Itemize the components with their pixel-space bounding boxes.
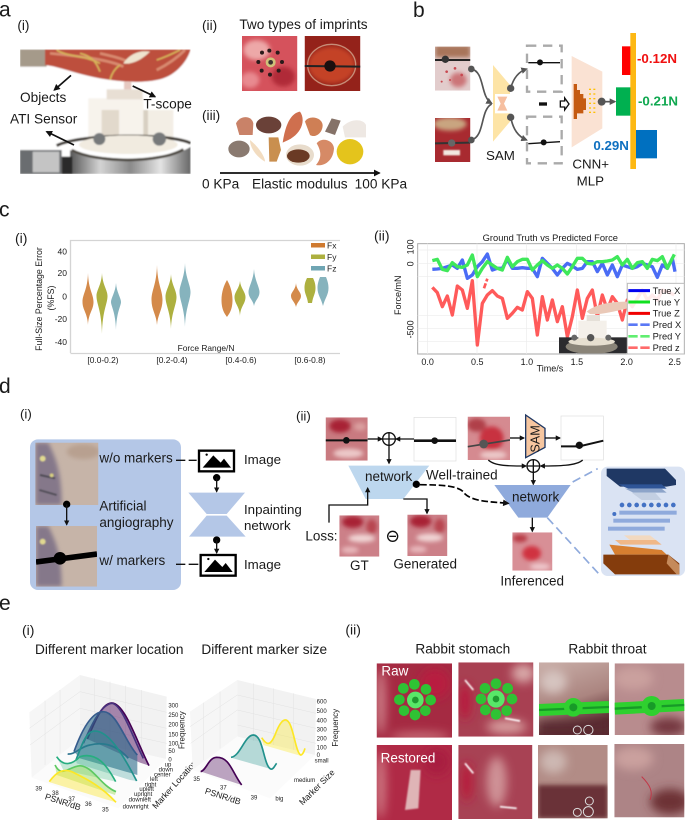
3D ridge chart: marker location: downright (123, 804, 149, 810)
chart title: Ground Truth vs Predicted Force (483, 233, 618, 243)
3D ridge chart: marker size: 600 (317, 700, 327, 706)
y axis title (34, 247, 56, 351)
3D ridge chart: marker size: big (275, 797, 283, 803)
dashed zoom lines (547, 469, 598, 573)
panel c(i): violin plot (15, 230, 340, 365)
legend: True X (653, 286, 681, 296)
violins Fy (96, 273, 316, 334)
image: restored stomach 2 (458, 745, 532, 819)
photo: force sensor and T-scope rig (20, 49, 191, 174)
3D ridge chart: marker location: Marker Location (150, 758, 199, 811)
axis label: 0 KPa to 100 KPa: 100 KPa (355, 177, 407, 192)
panel text: Artificial (99, 498, 147, 513)
inference network: network (512, 489, 559, 504)
input image 2 (435, 118, 470, 162)
label: Inferenced: Inferenced (500, 573, 564, 588)
series: red prediction peak (484, 279, 487, 288)
3D ridge chart: marker size: 200 (317, 737, 327, 743)
label: CNN+ MLP: CNN+ (572, 157, 609, 172)
axis label: 0 KPa to 100 KPa: 0 KPa (202, 177, 240, 192)
panel c(ii): force line chart (374, 228, 684, 373)
label (i): (i) (15, 230, 27, 246)
3D ridge chart: marker location: upleft (139, 787, 154, 793)
output force bar chart: 0.29N (593, 138, 629, 153)
3D ridge chart: marker location: 36 (85, 802, 92, 808)
loss path (329, 488, 532, 531)
image: GT (339, 515, 380, 557)
label (i): (i) (17, 18, 29, 33)
3D ridge chart: marker size: 35 (193, 777, 201, 783)
axis tick labels: 2.0 (620, 357, 633, 367)
legend (627, 283, 684, 354)
label: CNN+ MLP: MLP (577, 173, 604, 188)
panel d(ii): training and inference (296, 409, 685, 588)
training network: network (365, 469, 412, 484)
axis tick labels: -500 (406, 320, 416, 338)
3D ridge chart: marker size: 500 (317, 709, 327, 715)
legend: Pred Y (653, 332, 682, 342)
blue data panel (30, 439, 181, 590)
axis tick labels: 1.5 (571, 357, 583, 367)
3D ridge chart: marker size: 100 (317, 745, 327, 751)
mask box bottom (527, 117, 562, 163)
label: ATI Sensor: ATI Sensor (10, 111, 78, 126)
image: restored throat 1 (538, 745, 608, 818)
panel e(i): PSNR ridge plots (22, 622, 340, 814)
label: Raw: Raw (381, 663, 409, 678)
image: line imprint (304, 36, 360, 91)
label: Image: Image (244, 452, 281, 467)
legend: True Z (653, 309, 680, 319)
3D ridge chart: marker size: 0 (317, 753, 321, 759)
training network (348, 466, 429, 499)
input image 1 (435, 46, 470, 90)
3D ridge chart: marker size: 37 (220, 786, 227, 792)
label: SAM: SAM (486, 148, 515, 163)
y axis ticks and title (55, 247, 67, 347)
violins Fz (111, 263, 328, 330)
label: Loss: Loss: (305, 529, 338, 544)
heading: Rabbit stomach: Rabbit stomach (415, 642, 510, 657)
axis tick labels: 1.0 (521, 357, 533, 367)
3D ridge chart: marker location: 37 (68, 797, 76, 803)
3D ridge chart: marker location: 39 (35, 787, 43, 793)
label: GT: GT (350, 558, 369, 573)
3D ridge chart: marker size: 400 (317, 718, 327, 724)
y axis ticks and title: -40 (55, 337, 67, 347)
x axis labels: Force Range/N (178, 343, 234, 353)
3D ridge chart: marker location: 35 (102, 808, 109, 814)
3D ridge chart: marker location: left (150, 777, 158, 783)
legend: Fz (327, 264, 336, 274)
3D ridge chart: marker location: downleft (129, 798, 151, 804)
label: Image: Image (244, 557, 281, 572)
3D ridge chart: marker size: 39 (251, 796, 258, 802)
axis tick labels: 100 (406, 239, 416, 254)
label: ATI Sensor (10, 111, 78, 145)
3D ridge chart: marker location: 50 (168, 749, 176, 755)
legend: Pred z (653, 343, 680, 353)
label: T-scope: T-scope (143, 97, 192, 112)
3D ridge chart: marker location: upright (134, 792, 153, 798)
series: red force Z (432, 281, 674, 345)
y axis ticks and title: -20 (55, 314, 67, 324)
panel text: w/ markers (98, 553, 166, 568)
axis label: 0 KPa to 100 KPa (202, 177, 407, 192)
legend: Pred X (653, 320, 682, 330)
dashed leader lines (176, 460, 198, 564)
connectors out of SAM (507, 69, 527, 140)
inpainting network hourglass (188, 493, 246, 537)
output force bar chart (593, 33, 678, 169)
label: Inpainting network (244, 502, 302, 533)
SAM block (526, 415, 545, 458)
SAM block: SAM (528, 425, 542, 453)
y axis title: (%FS) (46, 285, 56, 310)
heading: Different marker location: Different marker location (35, 642, 184, 657)
3D ridge chart: marker location: 300 (168, 704, 179, 710)
predicted mask image (561, 416, 603, 460)
heading: Different marker size: Different marker size (201, 642, 327, 657)
image with markers (36, 526, 97, 587)
legend (311, 240, 337, 274)
image: dot imprint (242, 36, 298, 91)
3D ridge chart: marker location: Frequency (177, 711, 186, 749)
image without markers (35, 442, 98, 505)
label: Objects: Objects (20, 90, 66, 105)
axis tick labels: 2.5 (668, 357, 681, 367)
heading: Two types of imprints: Two types of imprints (239, 17, 368, 32)
3D ridge chart: marker size: Frequency (331, 709, 340, 747)
label: CNN+ MLP (572, 157, 609, 188)
heading: Rabbit throat: Rabbit throat (568, 642, 647, 657)
legend: True Y (653, 297, 681, 307)
minus sign and hollow arrow (539, 98, 569, 110)
label (ii): (ii) (374, 228, 390, 244)
mask box top (527, 46, 562, 92)
image: raw stomach 1 (376, 663, 452, 738)
connectors (213, 474, 220, 553)
label (i): (i) (20, 406, 32, 421)
3D ridge chart: marker size (190, 680, 340, 807)
axis titles: Time/s (537, 363, 564, 373)
y axis ticks and title: 0 (62, 292, 67, 302)
panel text: angiography (99, 515, 174, 530)
axis tick labels: 0.5 (471, 357, 483, 367)
axis titles: Force/mN (393, 276, 403, 315)
mask image (414, 417, 456, 461)
3D ridge chart: marker location: 250 (168, 713, 179, 719)
image: restored throat 2 (614, 744, 684, 818)
3D ridge chart: marker location: 0 (168, 758, 172, 764)
connector between images (63, 501, 70, 525)
panel e(ii): raw vs restored images (345, 621, 685, 820)
image: Generated (407, 514, 448, 556)
y axis title: Full-Size Percentage Error (34, 247, 44, 351)
legend: Fx (327, 240, 337, 250)
dashed arrow between networks (413, 481, 508, 503)
panel b: force estimation pipeline (433, 33, 678, 188)
icons: tissue objects (228, 112, 366, 166)
CNN+MLP block (572, 56, 615, 147)
x axis labels (87, 343, 326, 365)
panel a: experimental setup (10, 17, 407, 192)
arrow: elastic modulus axis (220, 170, 379, 175)
output force bar chart: -0.21N (638, 93, 678, 108)
icon: image top (199, 451, 234, 471)
label (ii): (ii) (296, 409, 311, 424)
axis tick labels: 0.0 (421, 357, 434, 367)
3D ridge chart: marker size: Marker Size (297, 767, 337, 807)
label (iii): (iii) (202, 108, 220, 123)
3D ridge chart: marker location (29, 675, 199, 814)
x axis labels: [0.6-0.8) (294, 355, 326, 365)
3D ridge chart: marker location: 200 (168, 723, 179, 729)
label: Generated: Generated (393, 557, 457, 572)
label (ii): (ii) (345, 621, 361, 637)
y axis ticks and title: 40 (58, 247, 67, 257)
3D ridge chart: marker location: center (154, 772, 171, 778)
connectors into SAM (468, 66, 492, 143)
image: restored stomach 1 (376, 745, 452, 820)
3D ridge chart: marker location: down (159, 768, 173, 774)
label: Inpainting network: network (244, 518, 291, 533)
image: tissue with line (326, 417, 368, 461)
label: Restored: Restored (381, 750, 435, 765)
label (ii): (ii) (202, 18, 217, 33)
3D ridge chart: marker size: PSNR/dB (204, 786, 242, 807)
3D ridge chart: marker location: PSNR/dB (44, 791, 82, 812)
axis titles (393, 276, 564, 373)
label: Objects (20, 75, 71, 105)
x axis labels: [0.0-0.2) (87, 355, 119, 365)
output force bar chart: -0.12N (637, 51, 677, 66)
violins Fx (82, 265, 301, 325)
panel text: w/o markers (98, 451, 173, 466)
minus symbol (388, 531, 398, 541)
panel text (98, 451, 174, 568)
3D ridge chart: marker location: 38 (52, 791, 59, 797)
3D ridge chart: marker size: small (315, 759, 329, 765)
3D ridge chart: marker size: 300 (317, 728, 327, 734)
axis tick labels (406, 239, 681, 367)
adder inference (488, 460, 583, 484)
image: tissue with marker (468, 416, 510, 460)
label: Inpainting network: Inpainting (244, 502, 302, 517)
y axis ticks and title: 20 (58, 268, 67, 278)
image: Inferenced (512, 532, 552, 571)
x axis labels: [0.4-0.6) (225, 355, 257, 365)
arrows around SAM (510, 436, 560, 440)
3D ridge chart: marker location: right (145, 782, 157, 788)
axis label: 0 KPa to 100 KPa: Elastic modulus (252, 177, 348, 192)
image: raw stomach 2 (458, 662, 534, 737)
image: raw throat 2 (614, 663, 684, 735)
x axis labels: [0.2-0.4) (156, 355, 188, 365)
panel d(i): inpainting workflow (20, 406, 302, 590)
SAM block (493, 65, 510, 142)
plot frame (70, 240, 340, 354)
network architecture panel (601, 467, 685, 576)
label: Well-trained: Well-trained (426, 467, 498, 482)
plot frame and grid (418, 244, 684, 354)
inset photo: finger pressing sensor (559, 302, 627, 354)
3D ridge chart: marker size: medium (294, 778, 315, 784)
axis tick labels: 0 (406, 261, 416, 266)
label: T-scope (133, 86, 192, 112)
image: raw throat 1 (539, 662, 609, 735)
icon: image bottom (201, 555, 236, 576)
series: blue force X (432, 254, 675, 278)
3D ridge chart: marker location: up (165, 763, 172, 769)
label (i): (i) (22, 622, 34, 638)
series: green force Y (432, 254, 674, 277)
adder and arrows (368, 433, 414, 463)
legend: Fy (327, 252, 337, 262)
3D ridge chart: marker location: 150 (168, 732, 179, 738)
inference network (494, 485, 571, 518)
3D ridge chart: marker location: 100 (168, 741, 179, 747)
